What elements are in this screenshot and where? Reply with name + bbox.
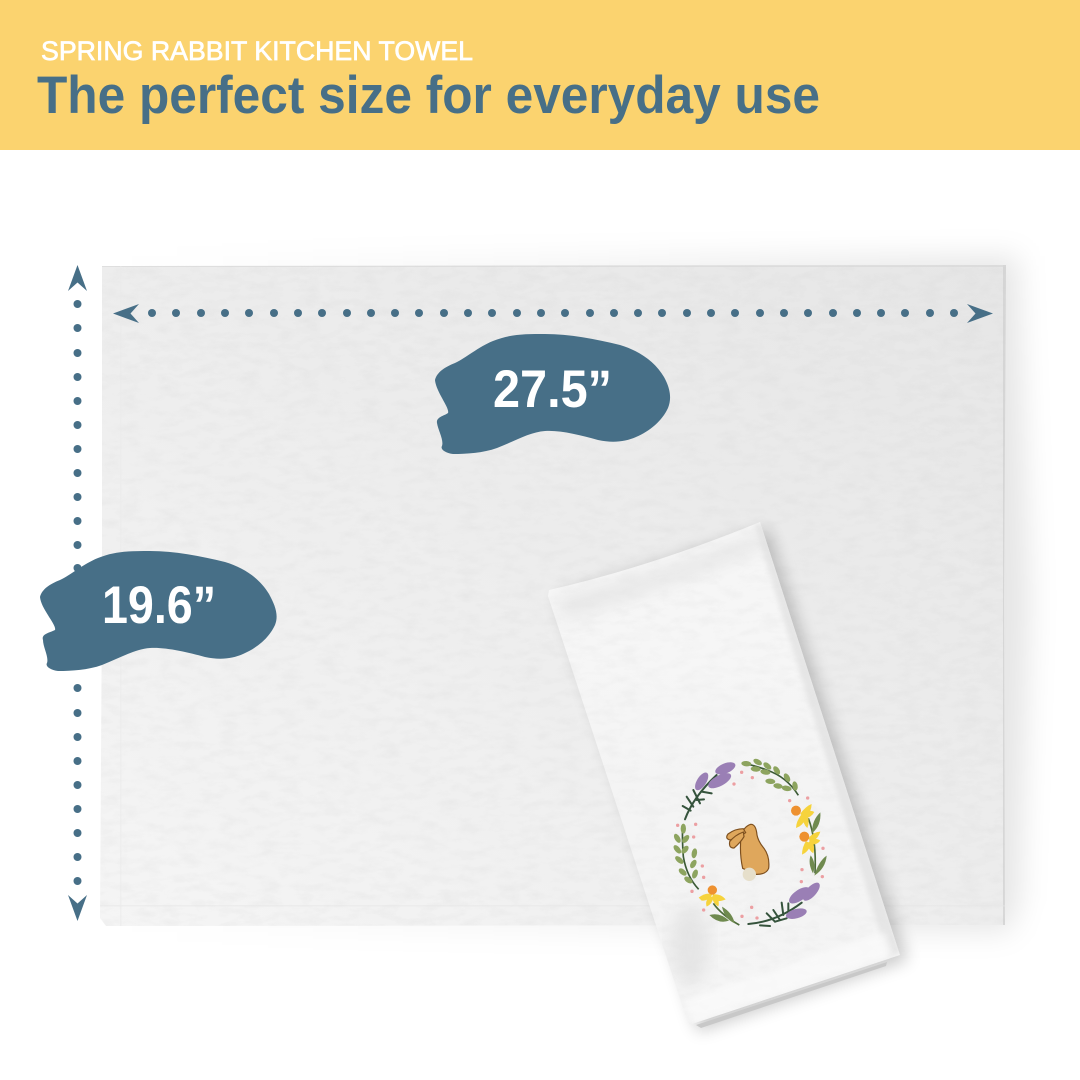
daffodils: right (791, 804, 827, 876)
label: 19.6” (102, 576, 216, 635)
leafy sprig: top right (741, 757, 798, 795)
lavender sprig: top left (683, 760, 737, 819)
daffodil: bottom left (699, 885, 739, 925)
callout: 27.5 inch (435, 334, 670, 454)
embroidered rabbit wreath (672, 757, 827, 926)
arrow: left (113, 304, 139, 323)
dotted line (148, 309, 958, 317)
title: The perfect size for everyday use (37, 66, 820, 125)
label: 27.5” (493, 360, 612, 419)
arrow: up (68, 265, 87, 291)
rabbit tail (743, 868, 756, 881)
header banner (0, 0, 1080, 150)
large unfolded towel (98, 256, 1030, 932)
pink french knots (676, 771, 825, 920)
vertical dimension: 19.6 inch (68, 265, 87, 921)
soft shading under the top fold (564, 538, 756, 615)
horizontal dimension: 27.5 inch (113, 304, 993, 323)
dotted line (74, 300, 82, 885)
arrow: down (68, 895, 87, 921)
eyebrow heading: SPRING RABBIT KITCHEN TOWEL (41, 36, 473, 66)
callout: 19.6 inch (40, 551, 277, 671)
arrow: right (967, 304, 993, 323)
folded towel (540, 515, 910, 1035)
lower folded layer (696, 962, 887, 1028)
leafy sprig: left (672, 824, 699, 889)
shadow (556, 528, 908, 1032)
lavender sprig: bottom right (748, 880, 823, 926)
rabbit (727, 824, 769, 881)
